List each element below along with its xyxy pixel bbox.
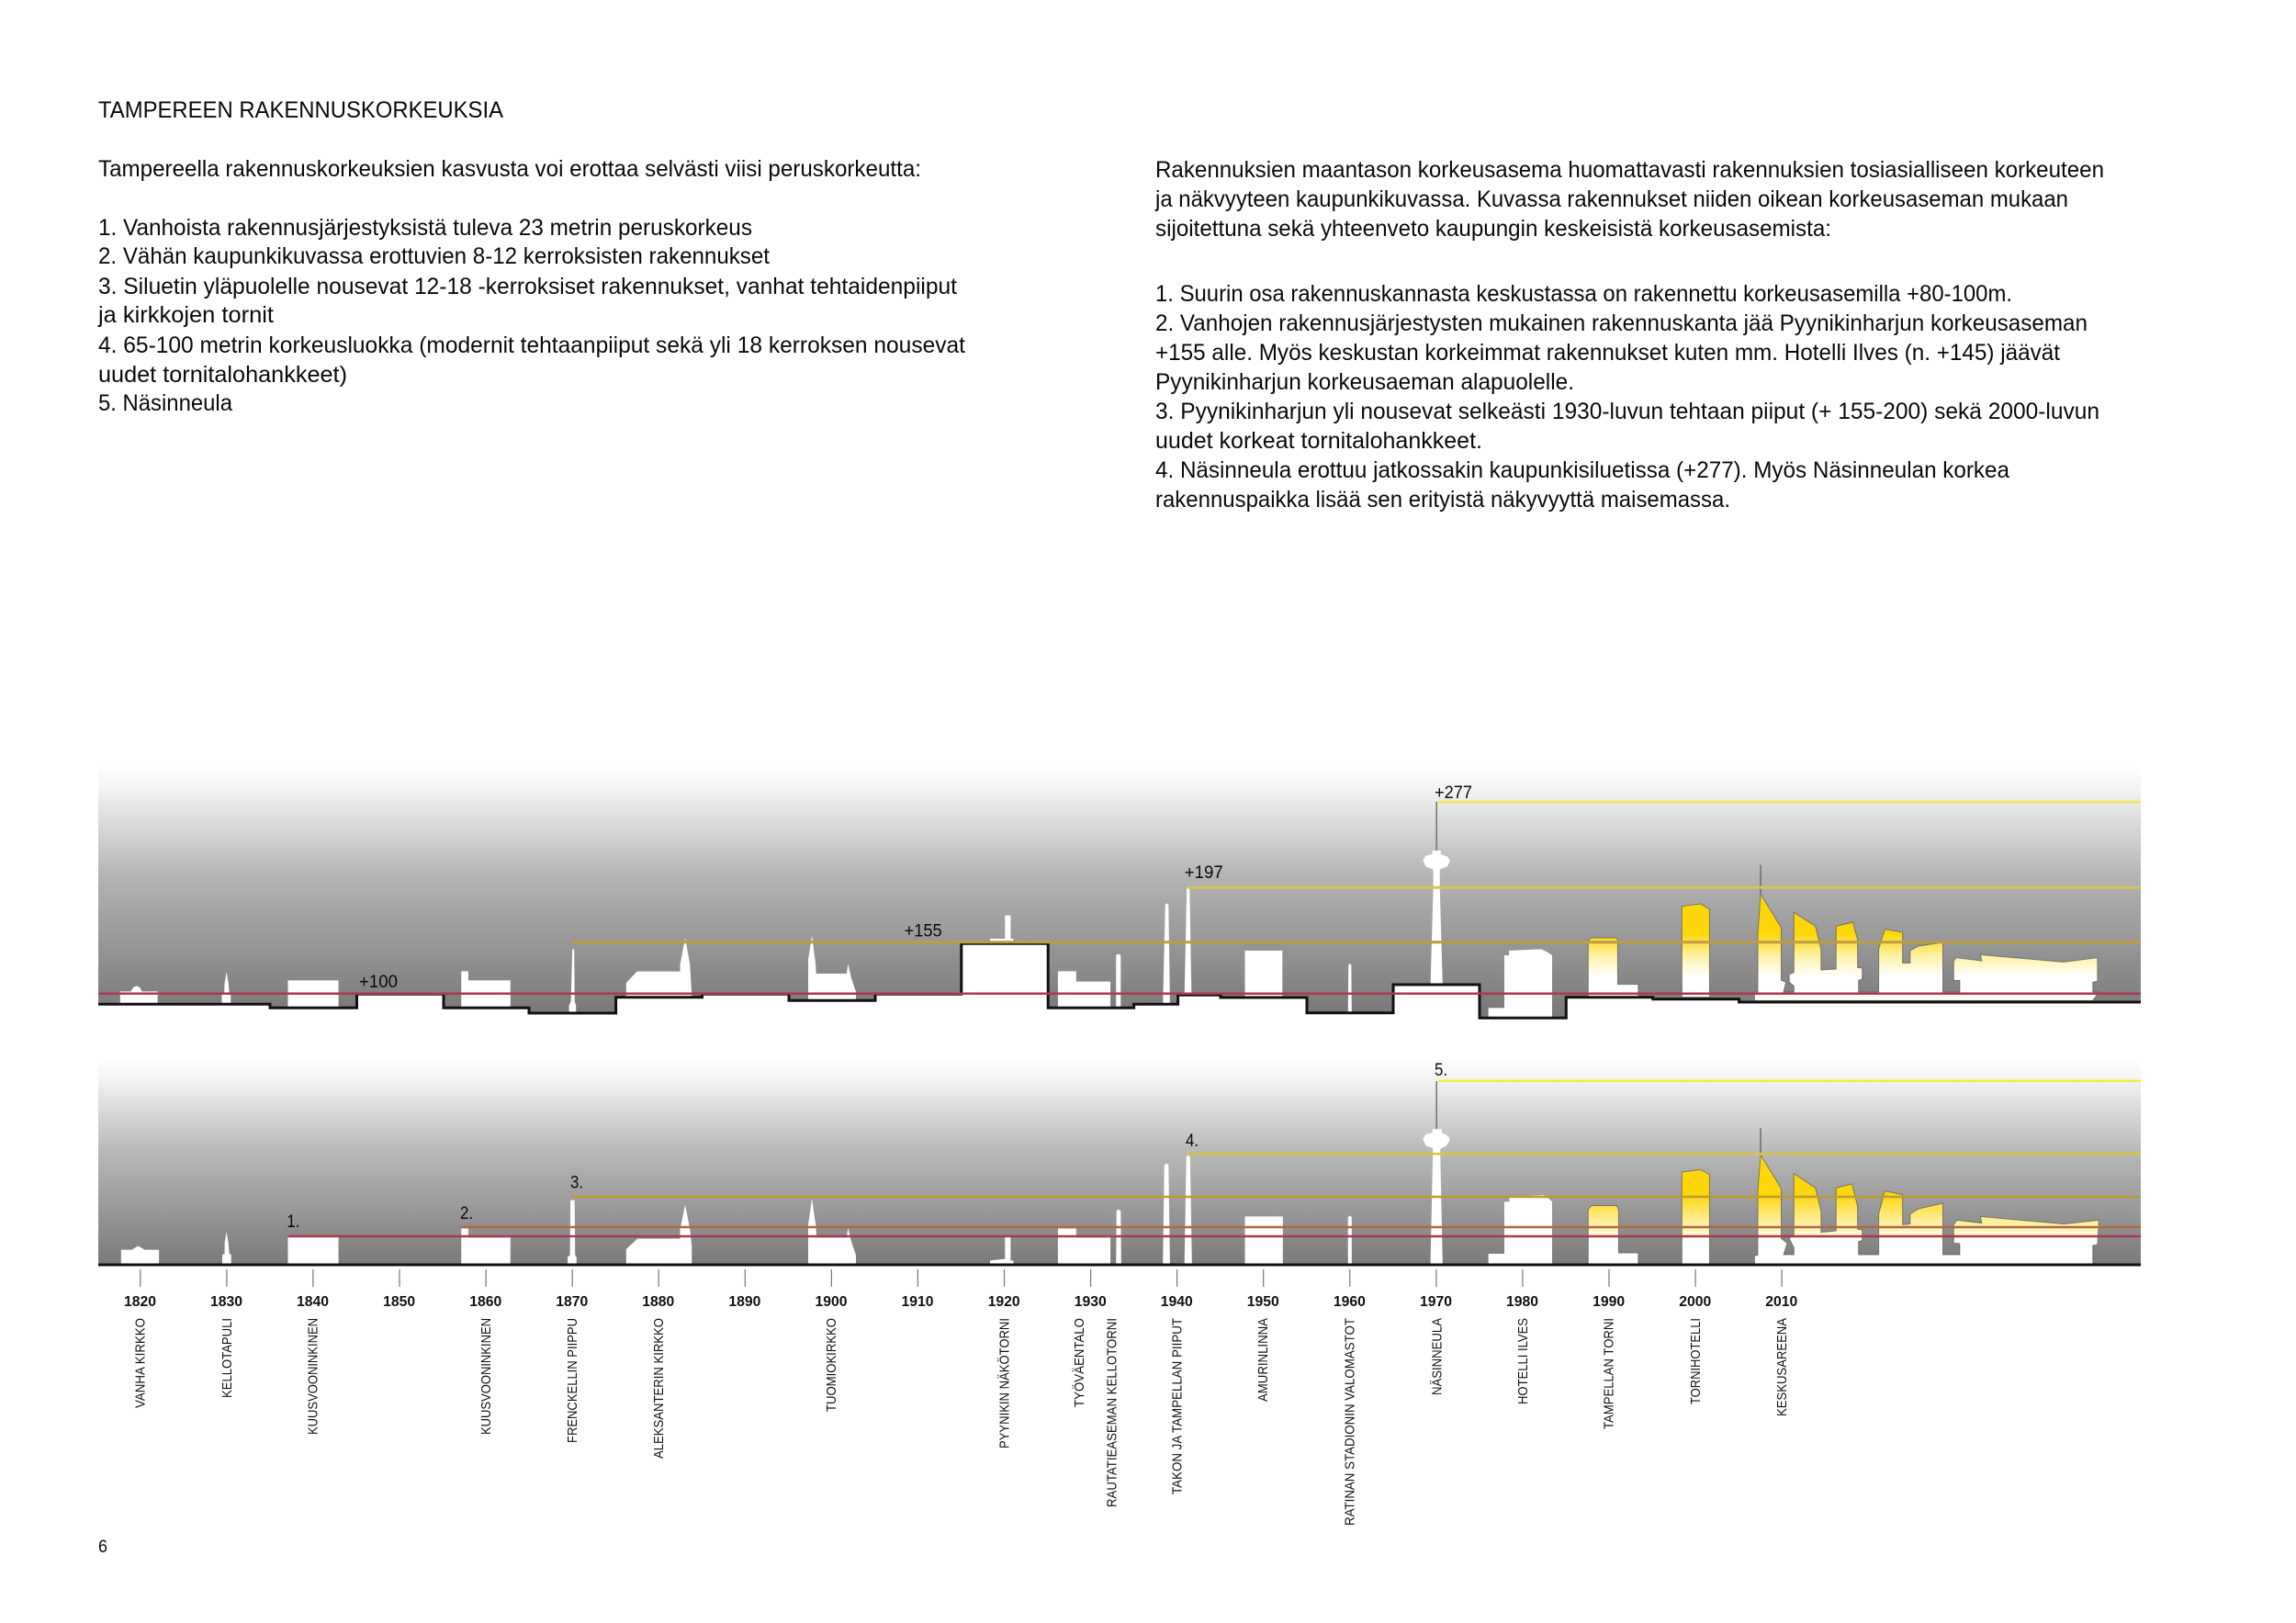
decade labels: 1840 [297,1294,329,1310]
numbered summary [1155,281,2099,513]
decade labels: 2010 [1765,1294,1797,1310]
numbered summary: rakennuspaikka lisää sen erityistä näkyvyyttä maisemassa. [1155,487,1730,513]
Näsinneula antenna [1435,1081,1437,1129]
timeline ticks [141,1269,1782,1287]
decade labels: 1960 [1334,1294,1366,1310]
list of heights: 3. Siluetin yläpuolelle nousevat 12-18 -kerroksiset rakennukset, vanhat tehtaidenpiiput [98,274,957,299]
decade labels: 1940 [1161,1294,1193,1310]
sky gradient above terrain [98,765,2141,1018]
vertical building names: VANHA KIRKKO [132,1318,149,1408]
decade labels: 1820 [124,1294,156,1310]
vertical building names: NÄSINNEULA [1430,1318,1446,1395]
height class numbers: 3. [570,1174,583,1192]
terrain profile [98,943,2141,1018]
list of heights [97,215,965,416]
elevation labels [359,783,1472,992]
decade labels: 1990 [1593,1294,1625,1310]
list of heights: 2. Vähän kaupunkikuvassa erottuvien 8-12 kerroksisten rakennukset [98,243,770,269]
elevation labels: +197 [1185,863,1223,883]
intro paragraph: Rakennuksien maantason korkeusasema huomattavasti rakennuksien tosiasialliseen korkeuteen [1155,157,2104,183]
buildings 1980-2010 [1489,865,2099,1018]
decade labels: 1850 [383,1294,415,1310]
elevation labels: +155 [905,922,942,941]
vertical building names [132,1318,1790,1526]
numbered summary: Pyynikinharjun korkeusaeman alapuolelle. [1155,369,1574,395]
vertical building names: KUUSVOONINKINEN [478,1318,494,1435]
vertical building names: TAMPELLAN TORNI [1602,1318,1616,1429]
list of heights: 1. Vanhoista rakennusjärjestyksistä tuleva 23 metrin peruskorkeus [98,215,752,241]
buildings 1900-1970 [808,851,1450,1013]
vertical building names: KESKUSAREENA [1774,1318,1790,1416]
decade labels: 1980 [1506,1294,1538,1310]
decade labels: 1870 [556,1294,588,1310]
decade labels: 1910 [902,1294,934,1310]
numbered summary: 4. Näsinneula erottuu jatkossakin kaupunkisiluetissa (+277). Myös Näsinneulan korkea [1155,457,2009,483]
chart: silhouette on a level baseline [98,1059,2141,1265]
buildings 1900-1970 [808,1129,1450,1264]
buildings 1820-1900 [120,938,692,1013]
numbered summary: uudet korkeat tornitalohankkeet. [1155,428,1482,454]
numbered summary: 2. Vanhojen rakennusjärjestysten mukainen rakennuskanta jää Pyynikinharjun korkeusaseman [1155,310,2088,336]
decade labels: 1890 [728,1294,760,1310]
Näsinneula antenna [1435,802,1437,851]
vertical building names: PYYNIKIN NÄKÖTORNI [996,1318,1012,1448]
title: TAMPEREEN RAKENNUSKORKEUKSIA [98,97,503,123]
height class numbers: 5. [1435,1061,1447,1080]
intro paragraph [1154,157,2104,242]
vertical building names: KELLOTAPULI [219,1318,235,1398]
decade labels [124,1294,1797,1310]
elevation labels: +277 [1435,783,1472,803]
vertical building names: AMURINLINNA [1255,1318,1271,1402]
elevation labels: +100 [359,973,398,992]
height class numbers: 1. [287,1212,299,1232]
page number: 6 [98,1538,107,1557]
chart: silhouette at true ground elevation [98,765,2141,1018]
decade labels: 1930 [1075,1294,1107,1310]
height class numbers [287,1061,1447,1232]
list of heights: uudet tornitalohankkeet) [98,362,347,388]
vertical building names: FRENCKELLIN PIIPPU [565,1318,580,1443]
vertical building names: TORNIHOTELLI [1688,1318,1704,1404]
decade labels: 1920 [988,1294,1020,1310]
level lines [98,802,2141,994]
decade labels: 1880 [642,1294,674,1310]
intro sentence: Tampereella rakennuskorkeuksien kasvusta voi erottaa selvästi viisi peruskorkeutta: [98,156,921,182]
sky gradient [98,1059,2141,1265]
intro paragraph: sijoitettuna sekä yhteenveto kaupungin keskeisistä korkeusasemista: [1155,216,1831,242]
vertical building names: RATINAN STADIONIN VALOMASTOT [1343,1318,1358,1526]
vertical building names: TYÖVÄENTALO [1071,1318,1087,1407]
vertical building names: TAKON JA TAMPELLAN PIIPUT [1170,1318,1185,1494]
numbered summary: 3. Pyynikinharjun yli nousevat selkeästi 1930-luvun tehtaan piiput (+ 155-200) sekä 2000-luvun [1155,399,2099,424]
numbered summary: +155 alle. Myös keskustan korkeimmat rakennukset kuten mm. Hotelli Ilves (n. +145) jäävät [1155,340,2060,366]
decade labels: 1950 [1247,1294,1279,1310]
ground line [98,1264,2141,1266]
numbered summary: 1. Suurin osa rakennuskannasta keskustassa on rakennettu korkeusasemilla +80-100m. [1155,281,2012,307]
decade labels: 1830 [210,1294,242,1310]
vertical building names: TUOMIOKIRKKO [824,1318,839,1412]
list of heights: 5. Näsinneula [98,390,232,416]
list of heights: 4. 65-100 metrin korkeusluokka (modernit tehtaanpiiput sekä yli 18 kerroksen nousevat [98,332,965,358]
vertical building names: HOTELLI ILVES [1515,1318,1531,1404]
buildings 1980-2010 [1489,1128,2099,1264]
text block: five base heights [97,156,965,416]
height level lines [288,1081,2141,1236]
decade labels: 1860 [469,1294,501,1310]
list of heights: ja kirkkojen tornit [97,302,274,328]
buildings 1820-1900 [121,1200,692,1264]
height class numbers: 4. [1186,1132,1199,1151]
decade labels: 2000 [1679,1294,1711,1310]
decade labels: 1900 [816,1294,848,1310]
text block: ground elevations [1154,157,2104,513]
vertical building names: KUUSVOONINKINEN [306,1318,321,1435]
intro paragraph: ja näkvyyteen kaupunkikuvassa. Kuvassa rakennukset niiden oikean korkeusaseman mukaan [1154,186,2068,212]
vertical building names: RAUTATIEASEMAN KELLOTORNI [1105,1318,1120,1507]
height class numbers: 2. [460,1204,473,1223]
decade labels: 1970 [1420,1294,1452,1310]
vertical building names: ALEKSANTERIN KIRKKO [651,1318,667,1459]
